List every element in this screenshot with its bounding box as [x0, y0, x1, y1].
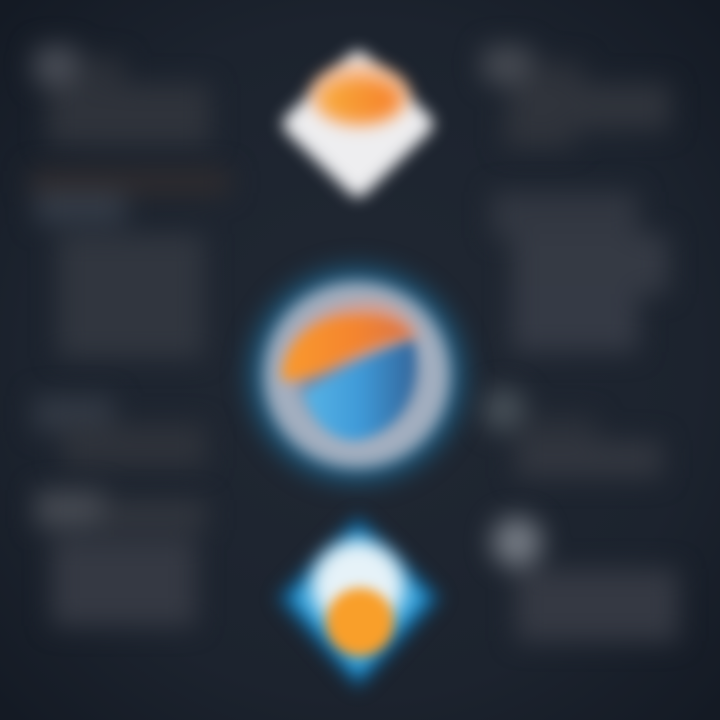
- diamond body: [294, 62, 422, 186]
- icon: top diamond: [294, 62, 422, 186]
- icon: central circle chart: [251, 269, 463, 481]
- blue segment: [304, 340, 416, 440]
- panel: bottom left text: [36, 490, 206, 626]
- pale halo above orange: [282, 302, 420, 385]
- outer blue glow: [251, 269, 463, 481]
- panel: lower middle left text: [34, 396, 206, 468]
- panel: bottom right text: [492, 517, 678, 641]
- panel: upper middle left text: [30, 170, 230, 358]
- orange halo: [310, 64, 410, 128]
- blue glow: [278, 516, 440, 688]
- white bloom: [312, 541, 404, 629]
- panel: top left text: [34, 46, 210, 146]
- panel: upper middle right text: [492, 192, 668, 352]
- orange dome: [322, 80, 398, 120]
- inner disc: [298, 314, 418, 434]
- panel: lower middle right text: [482, 388, 662, 478]
- orange sun: [326, 588, 394, 656]
- grey ring: [264, 282, 450, 468]
- orange segment: [282, 316, 414, 380]
- blue diamond body: [298, 538, 420, 668]
- panel: top right text: [482, 46, 670, 148]
- icon: bottom diamond: [278, 516, 440, 688]
